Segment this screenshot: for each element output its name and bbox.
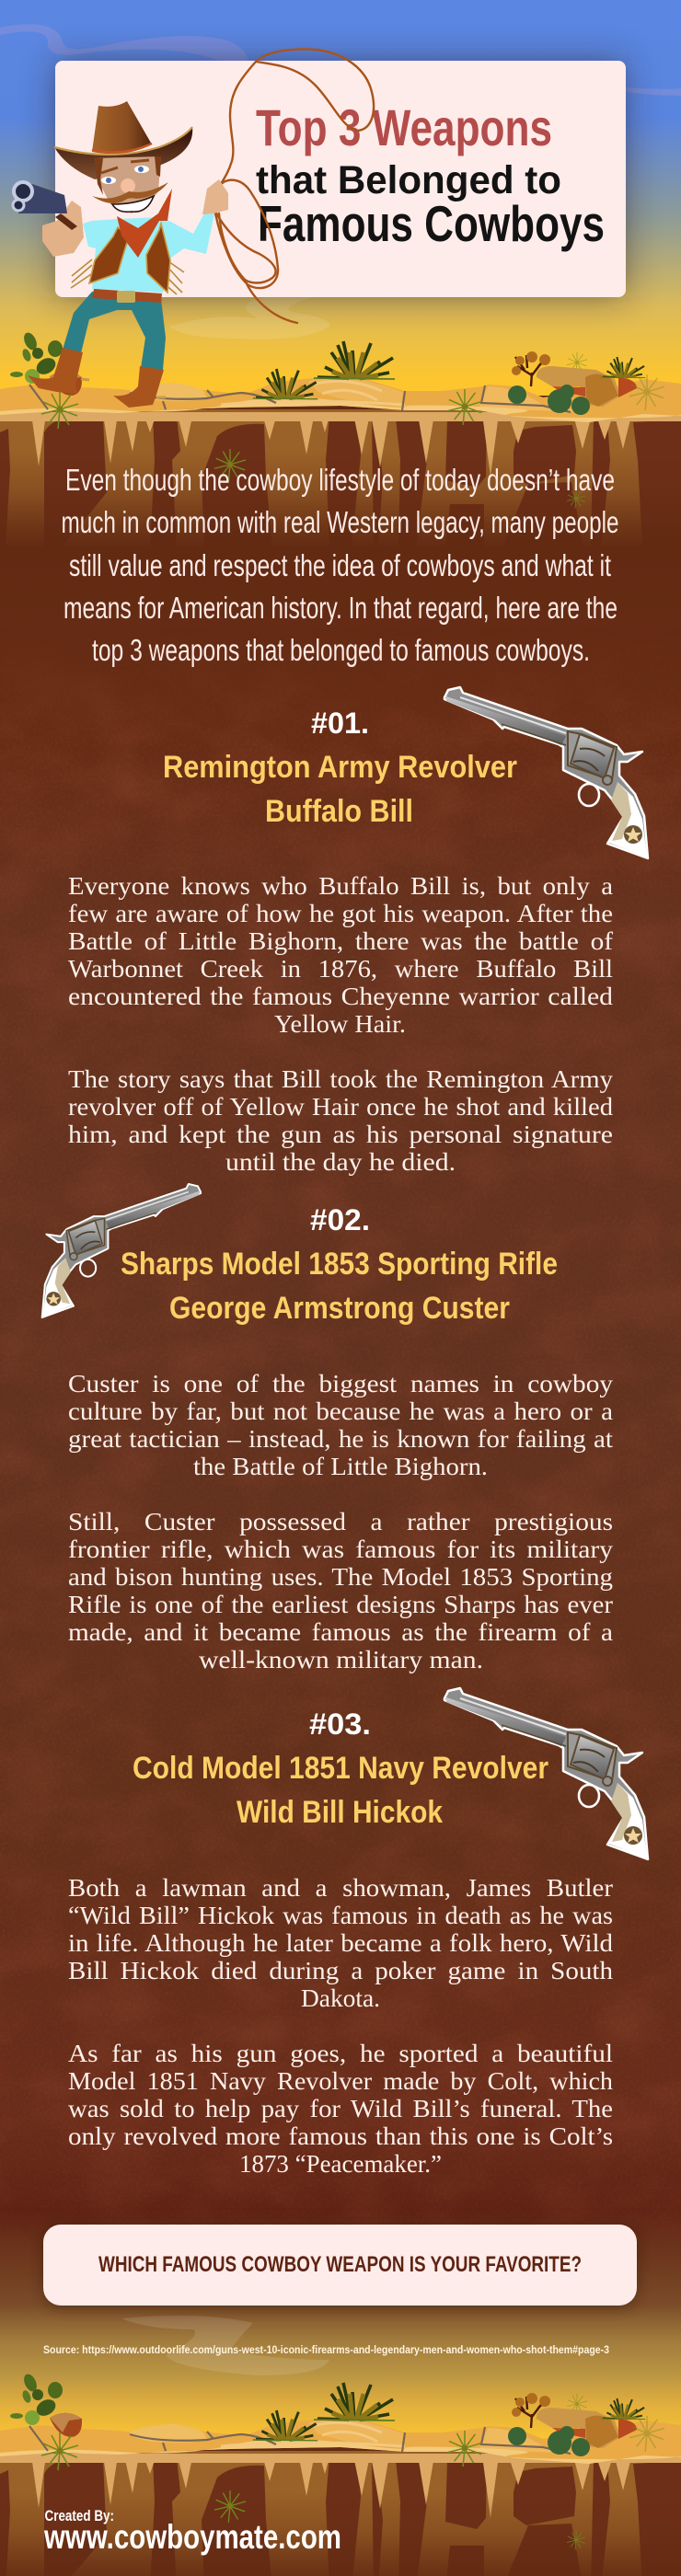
section 03 body text: Both a lawman and a showman, James Butler bbox=[68, 1873, 613, 1902]
section 02 body text: made, and it became famous as the firearm of a bbox=[68, 1617, 613, 1646]
title heading: Famous Cowboys bbox=[258, 195, 605, 252]
hair bbox=[95, 156, 161, 195]
mouth bbox=[112, 196, 154, 212]
section 02 body text: frontier rifle, which was famous for its military bbox=[68, 1535, 613, 1563]
vest bbox=[89, 224, 170, 293]
lasso rope bbox=[215, 49, 374, 323]
revolver in hand bbox=[11, 180, 77, 230]
section 03 body text: Bill Hickok died during a poker game in South bbox=[68, 1956, 613, 1984]
credit bbox=[43, 2507, 341, 2556]
revolver icon 2 bbox=[42, 1184, 201, 1317]
section 03 body text: in life. Although he later became a folk hero, Wild bbox=[68, 1928, 613, 1957]
revolver icon 3 bbox=[444, 1688, 648, 1859]
title heading: that Belonged to bbox=[256, 158, 561, 202]
sky background bbox=[0, 0, 681, 396]
section 02 body text: and bison hunting uses. The Model 1853 Sporting bbox=[68, 1562, 613, 1591]
mustache bbox=[92, 182, 168, 203]
section 02 body text bbox=[68, 1369, 613, 1673]
call to action panel bbox=[43, 2225, 637, 2306]
section 02 body text: Custer is one of the biggest names in cowboy bbox=[68, 1369, 613, 1397]
bottom cliff scene bbox=[0, 2372, 681, 2576]
brown body background bbox=[0, 515, 681, 2226]
section 02 body text: Rifle is one of the earliest designs Sharps has ever bbox=[68, 1590, 613, 1618]
section 03 heading: #03. bbox=[309, 1708, 371, 1741]
shirt torso and sleeve bbox=[83, 213, 214, 293]
section 03 body text: was sold to help pay for Wild Bill’s funeral. The bbox=[68, 2094, 613, 2122]
section 02 heading: George Armstrong Custer bbox=[169, 1291, 510, 1326]
call to action shadow bbox=[43, 2227, 637, 2308]
section 02 body text: great tactician – instead, he is known for failing at bbox=[68, 1424, 613, 1453]
title heading: Top 3 Weapons bbox=[256, 98, 552, 156]
section 01 body text: until the day he died. bbox=[225, 1147, 456, 1176]
section 01 body text: Battle of Little Bighorn, there was the battle of bbox=[68, 926, 614, 955]
section 03 body text: Model 1851 Navy Revolver made by Colt, which bbox=[68, 2066, 613, 2095]
hat brim back bbox=[54, 127, 192, 179]
section 01 body text: The story says that Bill took the Remington Army bbox=[68, 1064, 613, 1093]
belt buckle bbox=[117, 291, 135, 303]
smoke wisps bbox=[0, 24, 681, 96]
title card shadow bbox=[55, 61, 626, 297]
section 01 body text: Everyone knows who Buffalo Bill is, but only a bbox=[68, 871, 613, 900]
smoke wisp lower bbox=[121, 2316, 329, 2375]
pants bbox=[63, 292, 166, 370]
scarf bbox=[117, 189, 172, 258]
section 03 heading: Wild Bill Hickok bbox=[237, 1795, 443, 1830]
title card panel bbox=[55, 61, 626, 297]
section 03 body text: As far as his gun goes, he sported a beautiful bbox=[68, 2039, 613, 2067]
right boot bbox=[113, 366, 164, 408]
section 02 heading: Sharps Model 1853 Sporting Rifle bbox=[121, 1247, 558, 1282]
section 03 body text: “Wild Bill” Hickok was famous in death as he was bbox=[68, 1901, 613, 1929]
section 03 body text bbox=[68, 1873, 613, 2178]
fringes bbox=[71, 259, 184, 294]
top cliff scene bbox=[0, 330, 681, 548]
intro paragraph bbox=[61, 463, 618, 667]
title heading bbox=[256, 98, 605, 252]
left boot bbox=[28, 348, 83, 394]
section 03 heading: Cold Model 1851 Navy Revolver bbox=[133, 1751, 548, 1786]
face bbox=[95, 156, 161, 213]
section 02 body text: culture by far, but not because he was a hero or a bbox=[68, 1397, 613, 1425]
hand with lasso bbox=[202, 179, 228, 214]
section 01 body text: him, and kept the gun as his personal signature bbox=[68, 1120, 613, 1148]
section 02 body text: well-known military man. bbox=[199, 1645, 483, 1673]
hat crown bbox=[92, 101, 152, 154]
hat band bbox=[92, 144, 152, 152]
section 02 body text: Still, Custer possessed a rather prestigious bbox=[68, 1507, 613, 1535]
section 03 body text: only revolved more famous than this one is Colt’s bbox=[68, 2122, 613, 2150]
hat rim bbox=[54, 127, 192, 155]
section 02 heading bbox=[121, 1203, 558, 1326]
section 01 body text: Warbonnet Creek in 1876, where Buffalo Bill bbox=[68, 954, 613, 983]
eyes bbox=[101, 160, 149, 184]
section 01 body text: Yellow Hair. bbox=[274, 1009, 406, 1038]
section 03 body text: Dakota. bbox=[301, 1984, 380, 2012]
section 01 heading: Buffalo Bill bbox=[265, 794, 413, 829]
bottom dusk background bbox=[0, 2208, 681, 2447]
fist bbox=[42, 201, 84, 257]
section 01 heading bbox=[163, 707, 517, 829]
section 01 heading: Remington Army Revolver bbox=[163, 750, 517, 785]
credit: www.cowboymate.com bbox=[43, 2518, 341, 2556]
credit: Created By: bbox=[44, 2507, 114, 2524]
spurs bbox=[81, 379, 166, 397]
section 01 body text: revolver off of Yellow Hair once he shot and killed bbox=[68, 1092, 613, 1121]
section 01 heading: #01. bbox=[311, 707, 369, 740]
section 03 body text: 1873 “Peacemaker.” bbox=[239, 2149, 442, 2178]
section 03 heading bbox=[133, 1708, 548, 1830]
revolver icon 1 bbox=[444, 687, 648, 858]
section 01 body text: few are aware of how he got his weapon. After the bbox=[68, 899, 613, 927]
source line: Source: https://www.outdoorlife.com/guns-west-10-iconic-firearms-and-legendary-men-and-women-who-shot-them#page-3 bbox=[43, 2343, 609, 2356]
section 02 body text: the Battle of Little Bighorn. bbox=[193, 1452, 488, 1480]
cowboy character bbox=[11, 101, 228, 408]
section 02 heading: #02. bbox=[310, 1203, 370, 1236]
section 01 body text: encountered the famous Cheyenne warrior called bbox=[68, 982, 613, 1010]
belt bbox=[92, 289, 162, 303]
section 01 body text bbox=[68, 871, 614, 1176]
nose bbox=[121, 178, 135, 193]
